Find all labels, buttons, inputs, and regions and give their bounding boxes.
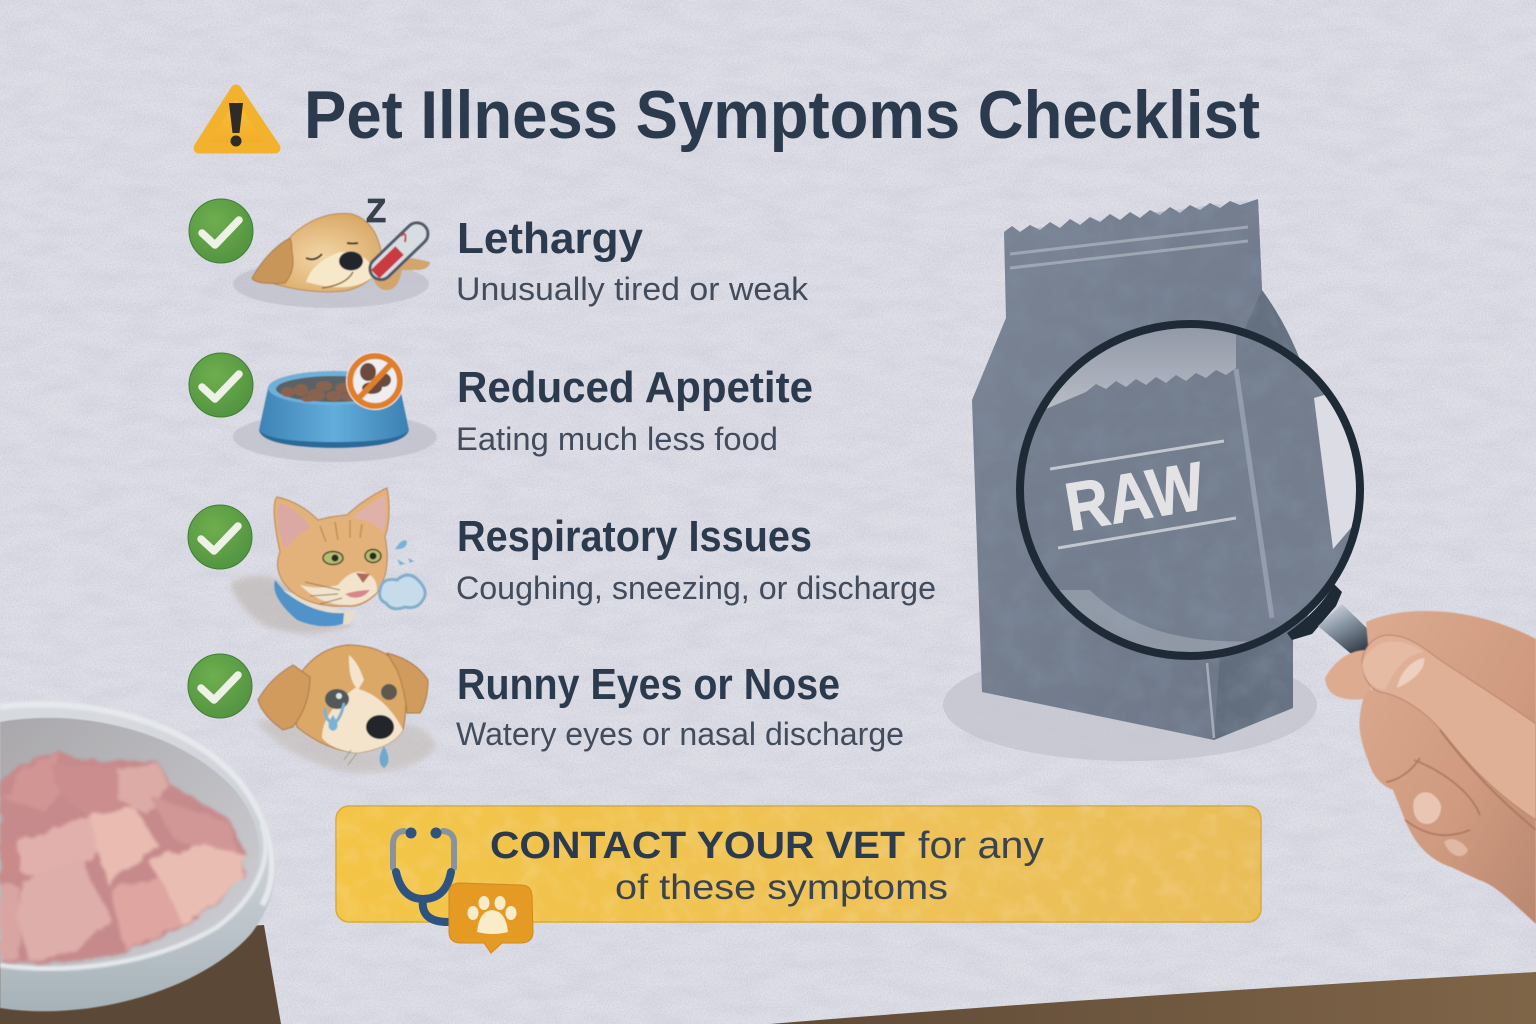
icon: check mark <box>188 505 252 569</box>
fingernails <box>1413 792 1441 824</box>
checklist item: lethargy <box>189 192 809 308</box>
checklist item: respiratory issues <box>188 488 936 633</box>
icon: check mark <box>189 199 253 263</box>
raw food bag <box>972 199 1342 740</box>
checklist item: reduced appetite <box>189 352 813 462</box>
lens mount <box>1287 584 1342 640</box>
raw meat chunks <box>0 749 246 965</box>
banner text: for any <box>918 825 1044 867</box>
checklist item: runny eyes or nose <box>188 645 904 773</box>
call to action banner <box>336 806 1261 953</box>
icon: sleeping dog with thermometer <box>233 213 432 308</box>
bag front <box>972 199 1262 740</box>
banner text: CONTACT YOUR VET <box>490 825 905 867</box>
heading: Reduced Appetite <box>457 363 813 412</box>
heading: Lethargy <box>457 214 644 263</box>
RAW label: RAW <box>1060 448 1210 546</box>
bowl rim highlight <box>0 704 272 905</box>
icon: check mark <box>188 654 252 718</box>
hand holding magnifier <box>1325 611 1536 924</box>
thumbnail <box>1397 658 1424 688</box>
description: Eating much less food <box>456 421 778 457</box>
raw meat bowl <box>0 701 276 1011</box>
bag shadow <box>943 649 1317 761</box>
icon: stethoscope <box>393 828 454 922</box>
lens interior <box>1046 328 1356 652</box>
description: Watery eyes or nasal discharge <box>456 716 904 752</box>
icon: Z sleep letter: Z <box>366 192 386 229</box>
icon: paw speech bubble <box>449 883 533 953</box>
banner text second line: of these symptoms <box>615 868 948 907</box>
heading: Runny Eyes or Nose <box>457 660 840 709</box>
wooden table <box>0 925 1536 1024</box>
icon: teary dog <box>255 645 436 773</box>
rear finger <box>1325 650 1372 699</box>
description: Coughing, sneezing, or discharge <box>456 570 936 606</box>
icon: sneezing cat <box>230 488 425 633</box>
thumb <box>1362 635 1536 820</box>
bowl body <box>0 701 276 1011</box>
description: Unusually tired or weak <box>456 271 809 307</box>
handle <box>1318 604 1376 663</box>
bowl interior <box>0 718 259 966</box>
title: Pet Illness Symptoms Checklist <box>304 77 1260 153</box>
icon: food bowl with no sign <box>233 352 437 462</box>
lens ring <box>1020 324 1360 656</box>
gusset <box>1205 200 1342 740</box>
heading: Respiratory Issues <box>457 512 812 561</box>
magnifying glass <box>1010 310 1376 670</box>
icon: check mark <box>189 353 253 417</box>
icon: warning triangle <box>199 90 275 148</box>
back of hand <box>1359 611 1536 924</box>
finger creases <box>1386 730 1536 835</box>
